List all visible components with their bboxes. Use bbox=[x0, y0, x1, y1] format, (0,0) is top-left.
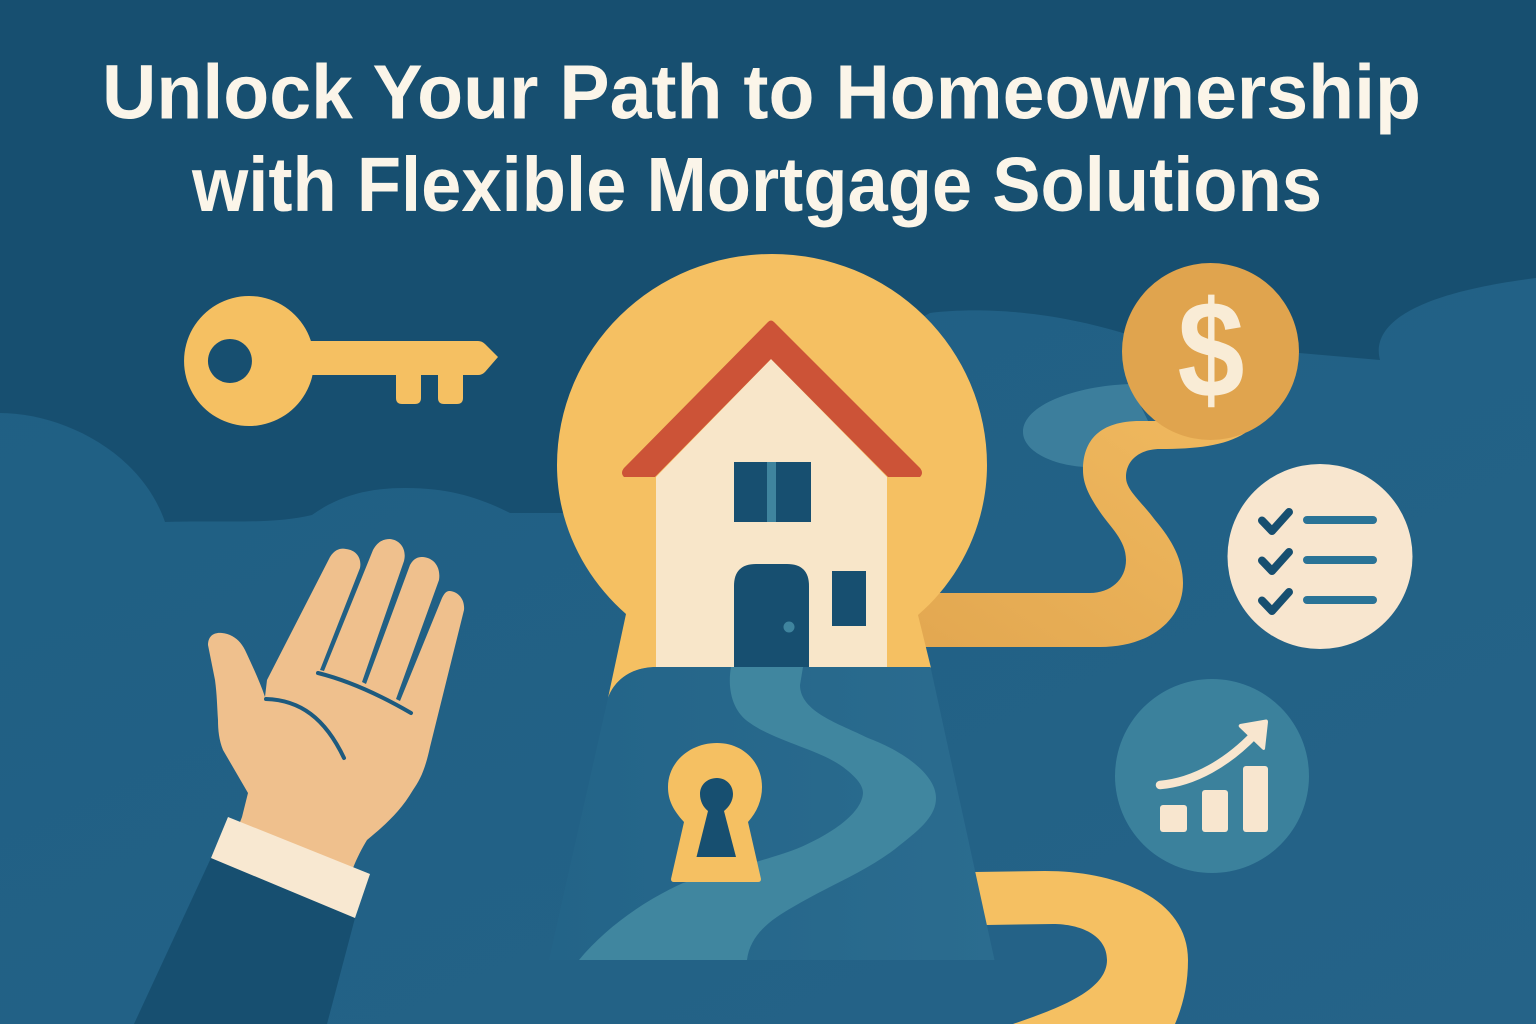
background hills bbox=[0, 278, 1536, 1024]
teal pond behind coin bbox=[1023, 384, 1150, 467]
house bbox=[622, 320, 922, 667]
icon: key bbox=[184, 296, 498, 426]
icon: growth chart bbox=[1115, 679, 1309, 873]
small keyhole bbox=[668, 743, 762, 882]
big keyhole bbox=[557, 254, 987, 698]
sleeve bbox=[134, 858, 355, 1024]
title: with Flexible Mortgage Solutions bbox=[191, 142, 1322, 228]
palm creases bbox=[266, 673, 411, 758]
bars bbox=[1160, 766, 1268, 832]
check marks bbox=[1262, 512, 1289, 611]
house body bbox=[656, 359, 887, 667]
icon: checklist bbox=[1228, 464, 1412, 649]
title: Unlock Your Path to Homeownership bbox=[102, 50, 1421, 136]
lower keyhole panel bbox=[549, 667, 994, 960]
upper window bbox=[734, 462, 811, 522]
hand and sleeve bbox=[134, 539, 464, 1024]
cuff bbox=[211, 817, 370, 918]
icon: dollar coin: $ bbox=[1178, 273, 1244, 427]
icon: dollar coin bbox=[1122, 263, 1299, 440]
door bbox=[734, 564, 809, 667]
list lines bbox=[1307, 520, 1373, 600]
winding path to coin bbox=[900, 421, 1245, 647]
hand bbox=[208, 539, 464, 885]
side window bbox=[832, 571, 866, 626]
teal road bbox=[579, 667, 936, 960]
arrow bbox=[1160, 720, 1268, 785]
title bbox=[102, 50, 1421, 228]
lower yellow path bbox=[974, 871, 1188, 1024]
roof bbox=[622, 320, 922, 477]
